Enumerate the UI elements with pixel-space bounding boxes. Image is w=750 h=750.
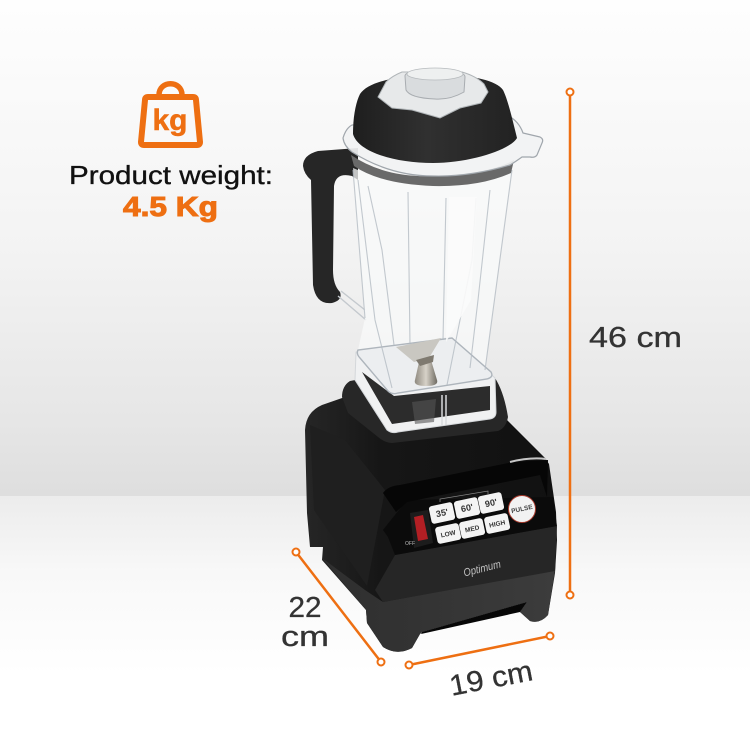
lid rim [343, 118, 543, 176]
speed keys: MED [465, 524, 480, 534]
power switch: OFF [405, 541, 415, 547]
brand logo: Optimum [462, 559, 502, 579]
blender base [305, 397, 557, 652]
lower front panel [375, 526, 557, 602]
foot gap [421, 602, 527, 634]
icon: weight bag: kg [152, 104, 188, 137]
label: depth: cm [281, 621, 329, 653]
blade assembly [396, 338, 441, 386]
left side highlight [310, 425, 385, 586]
jar collar [355, 337, 496, 433]
speed keys: HIGH [489, 519, 506, 530]
value: weight: 4.5 Kg [123, 191, 218, 222]
speed keys [428, 492, 511, 544]
hood [383, 460, 548, 512]
label: height: 46 cm [589, 322, 682, 354]
label: width: 19 cm [447, 655, 535, 703]
blender [303, 68, 557, 652]
dimension: depth line [292, 548, 384, 666]
speed keys: 35' [435, 507, 449, 519]
lid black dome [353, 75, 517, 163]
pulse button: PULSE [511, 504, 534, 515]
jar body [353, 168, 512, 394]
jar dark band [351, 155, 514, 186]
speed keys: 90' [484, 497, 498, 509]
heading: product weight: Product weight: [69, 160, 273, 190]
dimension: height line [566, 88, 574, 598]
lower skirt [322, 558, 555, 652]
power switch [405, 510, 433, 548]
pulse bracket [440, 491, 488, 502]
speed keys: LOW [440, 529, 457, 539]
clear lid cap [378, 68, 488, 118]
blender handle [303, 148, 366, 320]
pulse button [508, 496, 536, 522]
background floor [0, 496, 750, 750]
label: depth: 22 [288, 592, 322, 624]
background wall [0, 0, 750, 496]
dimension: width line [406, 632, 554, 668]
label: depth [281, 592, 329, 653]
rubber pad [342, 368, 508, 443]
control panel [383, 497, 557, 555]
speed keys: 60' [460, 502, 474, 514]
icon: weight bag [141, 84, 200, 145]
